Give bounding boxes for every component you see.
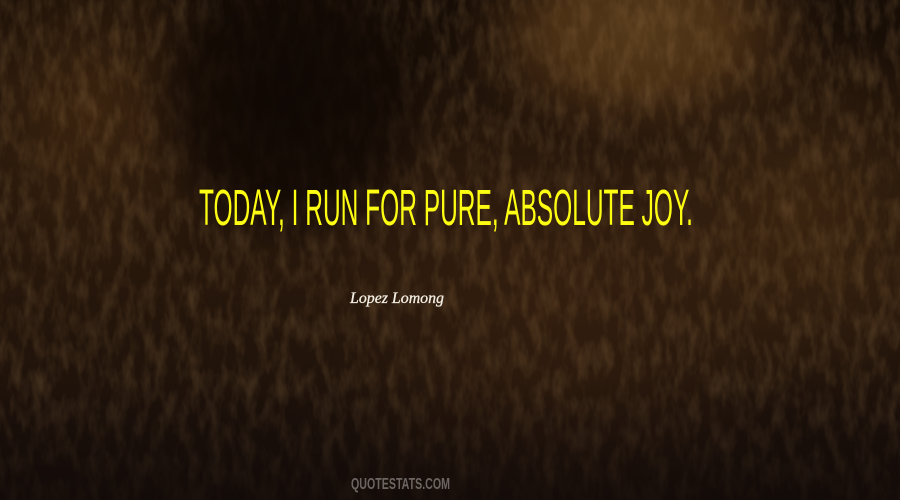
source watermark: QUOTESTATS.COM	[351, 476, 450, 493]
author name: Lopez Lomong	[349, 290, 444, 307]
